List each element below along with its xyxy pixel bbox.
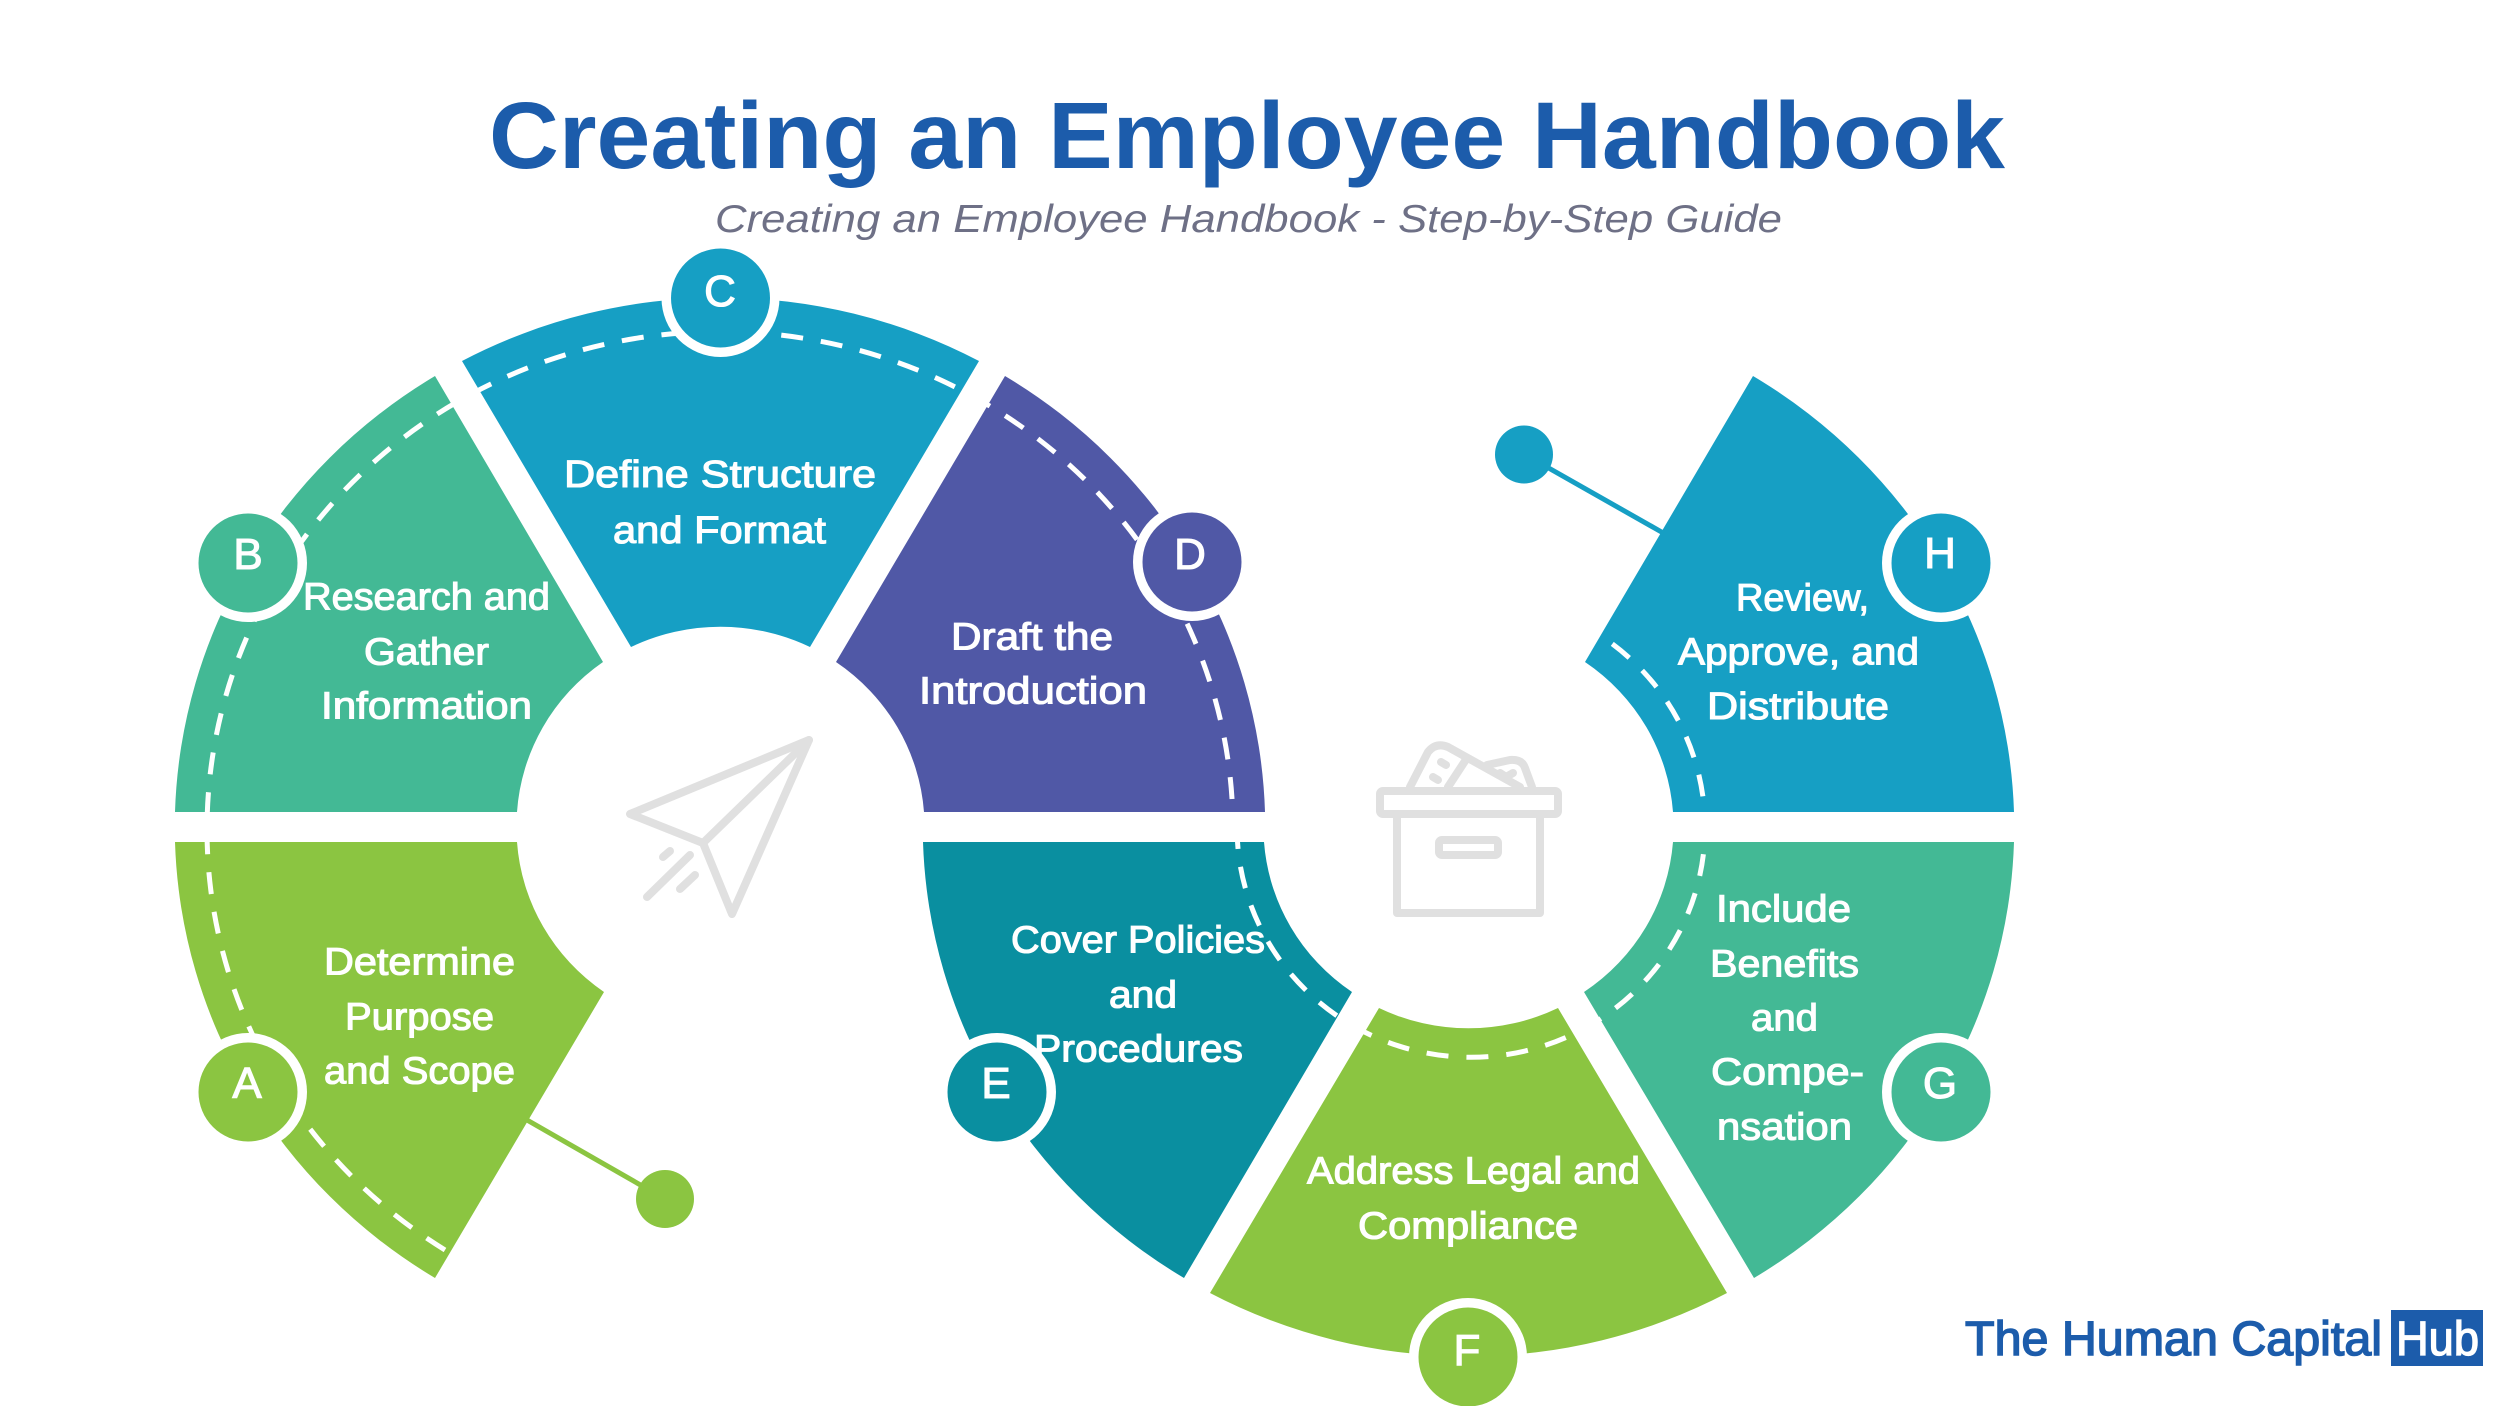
badge H: H: [1924, 529, 1956, 578]
panel: F Address Legal and Compliance: [1210, 1008, 1727, 1356]
dashed route through right ring: [1237, 636, 1705, 1057]
label E: Cover Policies: [1011, 920, 1265, 962]
badge C: C: [704, 267, 736, 316]
badge D: [1133, 503, 1251, 621]
label C: [564, 454, 876, 552]
panel: A Determine Purpose and Scope: [175, 842, 604, 1278]
label G: Compe-: [1711, 1052, 1864, 1094]
label G: Benefits: [1710, 944, 1859, 986]
label G: nsation: [1717, 1106, 1852, 1148]
title: Creating an Employee Handbook: [489, 83, 2005, 189]
segment A: [175, 842, 604, 1278]
label H: Distribute: [1707, 686, 1889, 728]
label D: Draft the: [951, 616, 1113, 658]
label A: and Scope: [324, 1050, 515, 1092]
badge H: [1882, 504, 2000, 622]
badge F: [1409, 1298, 1527, 1406]
label F: Compliance: [1358, 1206, 1578, 1248]
badge C: [662, 239, 780, 357]
segment G: [1584, 842, 2014, 1278]
badge E: [938, 1033, 1056, 1151]
badge G: [1882, 1033, 2000, 1151]
logo: The Human Capital Hub: The Human Capital: [1965, 1313, 2382, 1366]
badge F: F: [1454, 1326, 1480, 1375]
badge B: B: [233, 530, 263, 579]
label H: [1678, 578, 1919, 728]
label B: Gather: [364, 632, 489, 674]
logo: The Human Capital Hub: Hub: [2396, 1313, 2479, 1366]
icon: paper plane: [630, 740, 809, 914]
label G: [1710, 888, 1864, 1148]
label B: Information: [321, 686, 532, 728]
badge A: A: [232, 1059, 262, 1108]
label E: [1011, 920, 1265, 1070]
label H: Approve, and: [1678, 632, 1919, 674]
badge B: [189, 504, 307, 622]
label E: Procedures: [1034, 1028, 1243, 1070]
label B: [303, 576, 550, 728]
label A: Purpose: [345, 996, 494, 1038]
badge A: [189, 1033, 307, 1151]
segment F: [1210, 1008, 1727, 1356]
label C: and Format: [613, 510, 826, 552]
label B: Research and: [303, 576, 550, 618]
label D: [919, 616, 1147, 712]
panel: H Review, Approve, and Distribute: [1585, 376, 2014, 812]
badge G: G: [1923, 1059, 1957, 1108]
panel: C Define Structure and Format: [462, 298, 979, 647]
connector: green dot on segment A: [520, 1116, 694, 1228]
panel: G Include Benefits and Compensation: [1584, 842, 2014, 1278]
segment B: [175, 376, 603, 812]
label E: and: [1109, 974, 1177, 1016]
label D: Introduction: [919, 670, 1147, 712]
label G: Include: [1716, 888, 1851, 930]
segment D: [836, 376, 1265, 812]
badge E: E: [981, 1059, 1011, 1108]
segment H: [1585, 376, 2014, 812]
panel: B Research and Gather Information: [175, 376, 603, 812]
label F: Address Legal and: [1307, 1150, 1640, 1192]
connector: blue dot on segment H: [1495, 426, 1665, 534]
segment E: [923, 842, 1352, 1278]
panel: E Cover Policies and Procedures: [923, 842, 1352, 1278]
label A: Determine: [324, 942, 515, 984]
segment C: [462, 298, 979, 647]
label F: [1307, 1150, 1640, 1248]
panel: D Draft the Introduction: [836, 376, 1265, 812]
badge D: D: [1174, 530, 1206, 579]
icon: box with documents: [1380, 745, 1558, 913]
label G: and: [1751, 998, 1818, 1040]
label C: Define Structure: [564, 454, 876, 496]
label A: [324, 942, 515, 1092]
dashed route through left ring: [207, 332, 1233, 1250]
subtitle: Creating an Employee Handbook - Step-by-Step Guide: [715, 198, 1782, 241]
label H: Review,: [1736, 578, 1869, 620]
